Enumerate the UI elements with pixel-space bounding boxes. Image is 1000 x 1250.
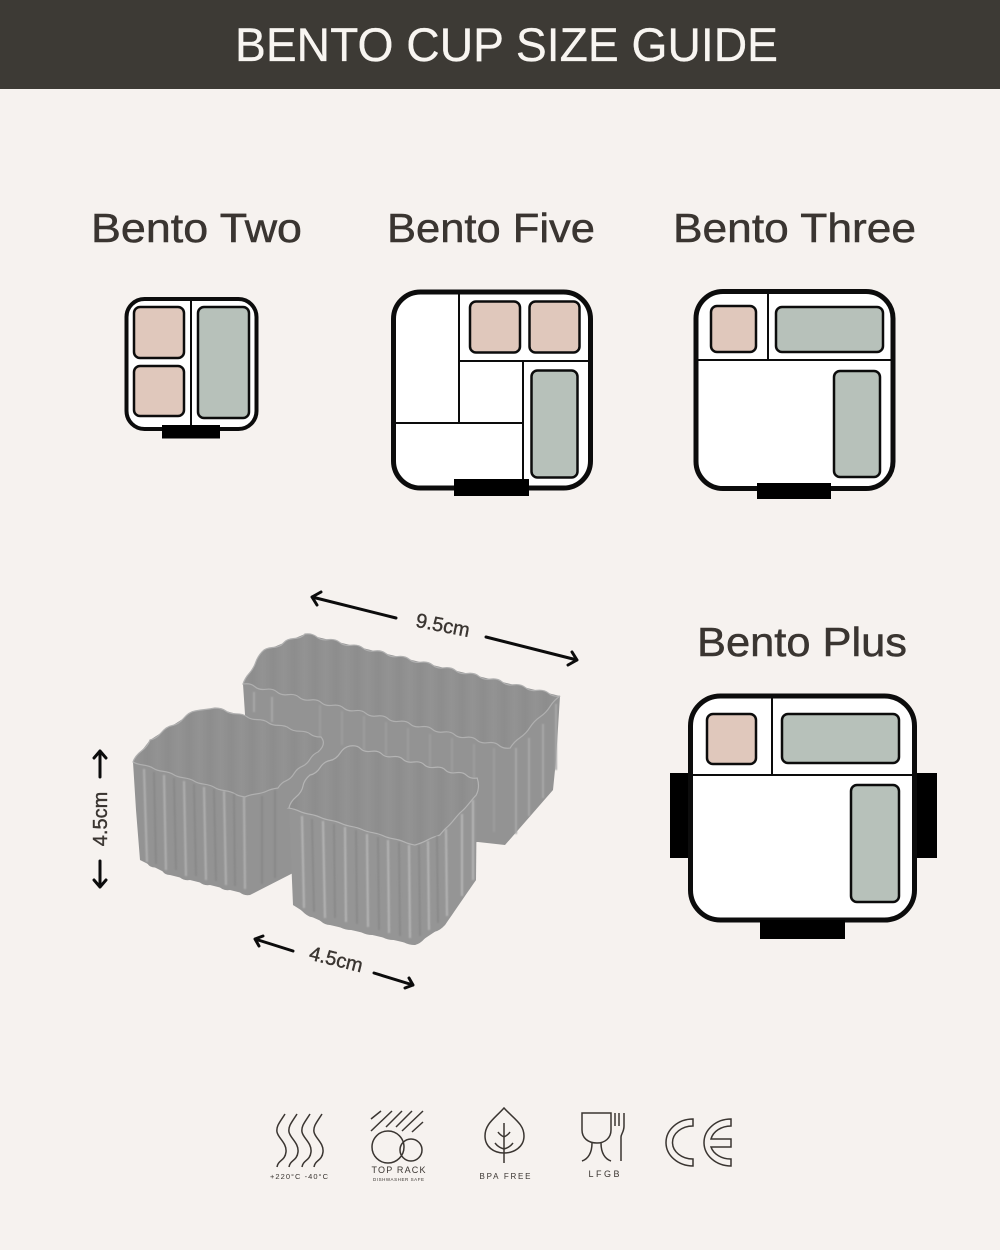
heading: Bento Three: Bento Three	[673, 205, 916, 251]
icon: CE mark	[666, 1119, 731, 1166]
dimension: 9.5cm width: 9.5cm	[414, 610, 472, 642]
dimension: 9.5cm width	[312, 592, 577, 665]
icon: top rack dishwasher safe	[371, 1111, 426, 1182]
diagram: Bento Three	[696, 292, 893, 499]
icon: BPA free leaf: BPA FREE	[480, 1172, 530, 1181]
icon: temperature range	[270, 1114, 329, 1181]
illustration: silicone cups	[133, 634, 560, 945]
icon: top rack dishwasher safe: DISHWASHER SAFE	[373, 1177, 424, 1182]
icon: LFGB food safe: LFGB	[588, 1169, 620, 1179]
icon: LFGB food safe	[582, 1113, 624, 1179]
heading: Bento Two: Bento Two	[91, 205, 302, 251]
heading: Bento Five: Bento Five	[387, 205, 595, 251]
heading: Bento Plus: Bento Plus	[697, 619, 907, 665]
icon: temperature range: +220°C -40°C	[270, 1172, 329, 1181]
diagram: Bento Five	[394, 292, 591, 496]
dimension: 4.5cm depth: 4.5cm	[307, 943, 365, 977]
icon: top rack dishwasher safe: TOP RACK	[372, 1165, 426, 1175]
icon: BPA free leaf	[480, 1108, 530, 1181]
dimension: 4.5cm depth	[255, 936, 413, 988]
dimension: 4.5cm height	[90, 751, 112, 887]
diagram: Bento Two	[126, 297, 256, 438]
title: BENTO CUP SIZE GUIDE	[235, 18, 778, 71]
cup: large rectangular	[243, 634, 560, 850]
dimension: 4.5cm height: 4.5cm	[90, 792, 112, 846]
diagram: Bento Plus	[670, 696, 937, 939]
cup: small left	[133, 708, 323, 895]
header band	[0, 0, 1000, 89]
cup: small front	[289, 746, 478, 945]
